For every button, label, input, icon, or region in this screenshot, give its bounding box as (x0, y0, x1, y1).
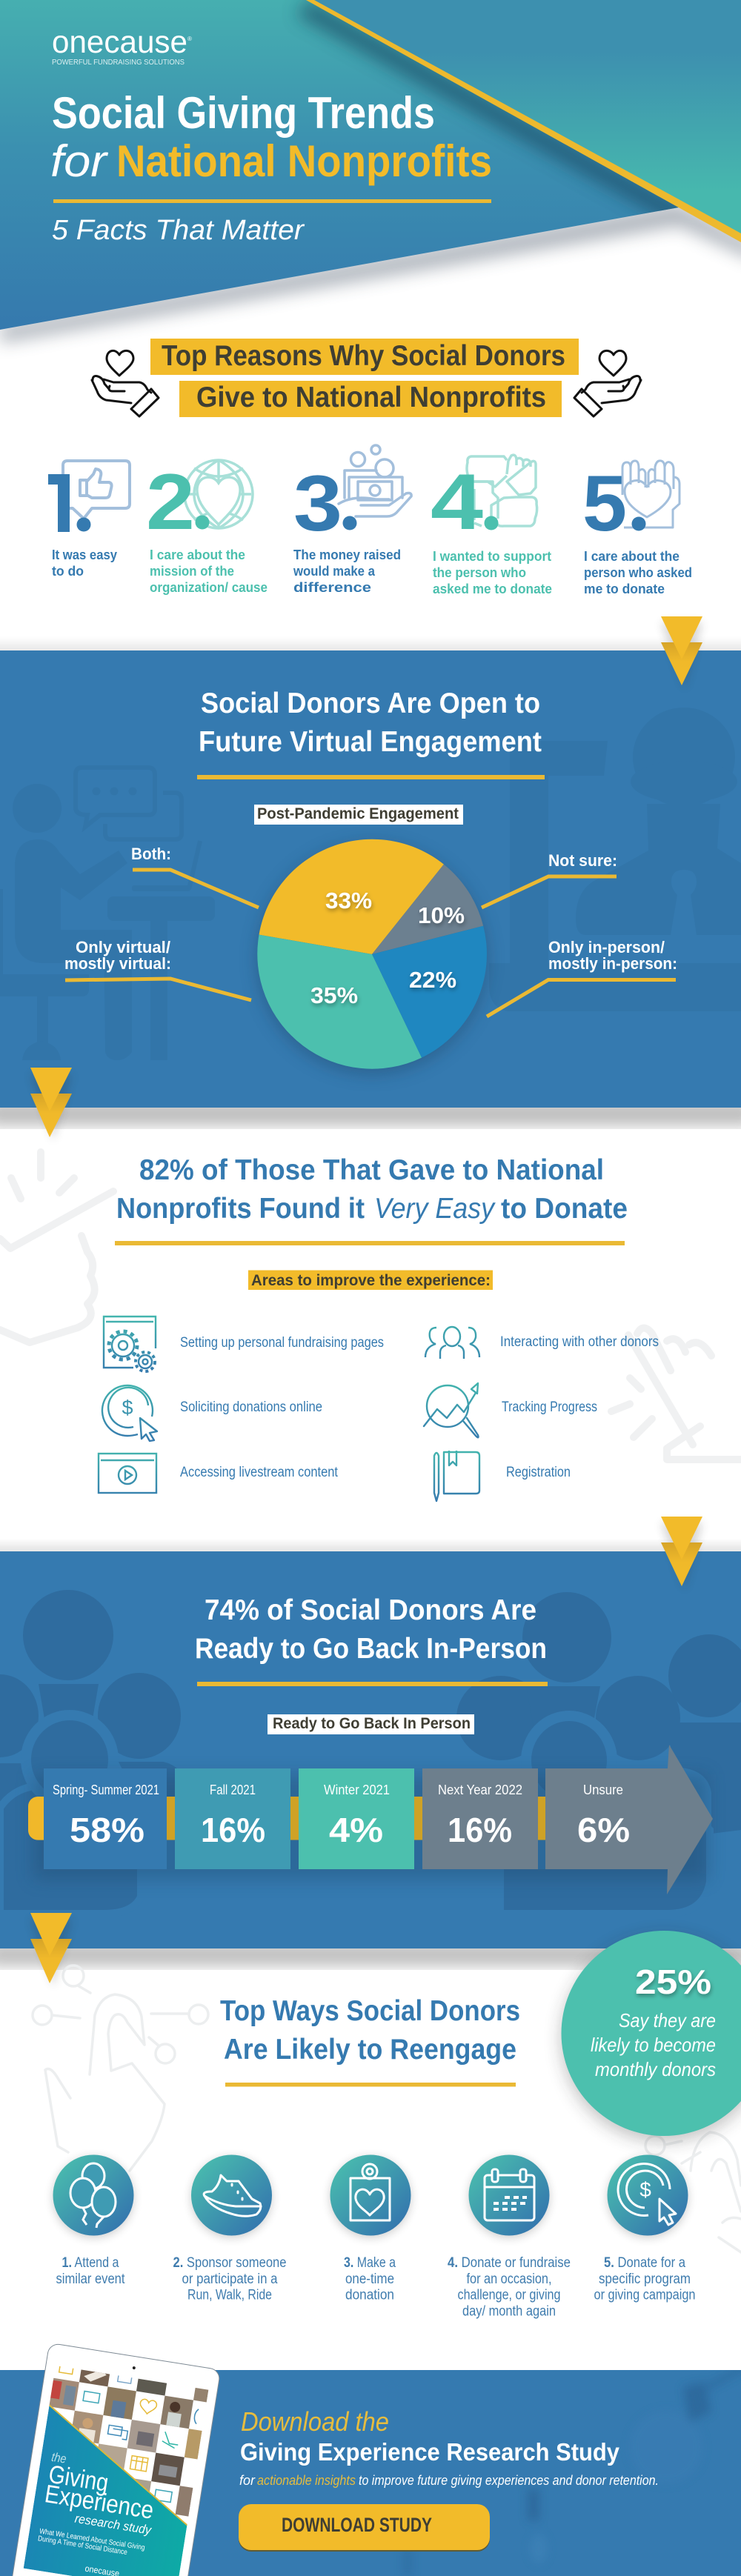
way 5: 5. Donate for a (604, 2255, 685, 2271)
subtitle: 5 Facts That Matter (52, 215, 305, 246)
panel: back in person (0, 1544, 741, 1964)
callout: 25 percent monthly donors: monthly donors (595, 2058, 716, 2080)
number 5: 5 (582, 459, 627, 548)
way 3: donation (345, 2288, 394, 2303)
reason text (52, 548, 117, 579)
way 1 (53, 2154, 133, 2287)
icon: group of people (425, 1327, 479, 1359)
call to action heading: Download the (241, 2406, 389, 2437)
cover title: During A Time of Social Distance (37, 2535, 128, 2557)
timeline segment: spring-summer 2021: Spring- Summer 2021 (53, 1783, 159, 1797)
heading: Top Ways Social Donors (220, 1995, 520, 2027)
item: tracking progress: Tracking Progress (502, 1400, 597, 1415)
background illustration: in-person attendee (489, 708, 741, 1011)
pie chart: 35% (310, 982, 358, 1008)
arrow: chevron into engagement panel (661, 616, 702, 689)
call to action description: actionable insights (257, 2473, 356, 2488)
way 5 (594, 2154, 695, 2303)
heading: Nonprofits Found it (116, 1193, 365, 1225)
reason text: I wanted to support (433, 549, 551, 564)
panel: top ways to reengage (33, 1966, 741, 2319)
item: tracking progress (424, 1383, 597, 1437)
callout: 25 percent monthly donors: 25% (635, 1963, 711, 2001)
logo: POWERFUL FUNDRAISING SOLUTIONS (52, 58, 185, 67)
reason 5 (582, 459, 692, 596)
number 4: 4 (431, 457, 483, 546)
timeline segment: unsure with arrow head (545, 1745, 713, 1894)
cover title: Giving (47, 2460, 110, 2497)
icon: calendar (468, 2154, 550, 2237)
callout: not sure: Not sure: (548, 851, 617, 870)
title (50, 88, 492, 186)
heading (195, 1594, 547, 1665)
heading: Very Easy (374, 1193, 496, 1225)
heading box line 1: Top Reasons Why Social Donors (162, 340, 565, 372)
reason text: organization/ cause (150, 580, 268, 595)
callout: not sure (482, 851, 617, 908)
icon: dollar and cursor (608, 2154, 688, 2237)
reason text: asked me to donate (433, 582, 552, 596)
callout: only in-person (487, 938, 677, 1016)
number 3: 3 (293, 459, 342, 548)
icon: donation box (330, 2154, 411, 2237)
reason text: difference (293, 580, 371, 595)
icon: hand holding money (339, 445, 411, 516)
way 4 (448, 2154, 571, 2319)
reason text: I care about the (584, 549, 679, 564)
reason 3 (293, 445, 411, 595)
icon: balloons (53, 2154, 133, 2237)
chart label: Post-Pandemic Engagement (257, 805, 459, 822)
item: interacting with donors (425, 1327, 659, 1359)
callout: only virtual (64, 938, 251, 1000)
timeline segment: spring-summer 2021 (44, 1768, 167, 1869)
reason text (150, 548, 268, 595)
button: download study: DOWNLOAD STUDY (282, 2514, 432, 2536)
title: for (50, 136, 108, 186)
reason 1 (48, 461, 130, 579)
pie chart (257, 839, 487, 1074)
timeline segment: fall 2021: 16% (201, 1811, 265, 1849)
reason text: would make a (293, 564, 376, 579)
reason text: The money raised (293, 548, 401, 562)
way 1: 1. Attend a (62, 2255, 119, 2271)
reason text: It was easy (52, 548, 117, 562)
timeline segment: fall 2021 (175, 1768, 290, 1869)
number 3 (293, 459, 357, 548)
logo: ® (187, 36, 192, 42)
way 2: Run, Walk, Ride (187, 2288, 272, 2303)
reason text: I care about the (150, 548, 245, 562)
reason text: the person who (433, 565, 526, 580)
number 4 (431, 457, 498, 546)
way 2: or participate in a (182, 2272, 278, 2287)
reason text: me to donate (584, 582, 665, 596)
item: registration (434, 1451, 571, 1501)
heading (220, 1995, 520, 2066)
arrow: chevron out of back in person panel (30, 1913, 72, 1987)
callout: both (131, 845, 259, 908)
callout: 25 percent monthly donors (562, 1931, 741, 2141)
reason text: mission of the (150, 564, 234, 579)
panel: download study (0, 2343, 741, 2576)
tablet mockup (0, 2343, 221, 2576)
reason text: to do (52, 564, 84, 579)
reason text (433, 549, 552, 596)
cover title: research study (74, 2512, 153, 2537)
item: soliciting donations: Soliciting donations online (180, 1400, 322, 1415)
way 3: one-time (345, 2272, 394, 2287)
heading: Are Likely to Reengage (224, 2034, 516, 2066)
reason 2 (146, 457, 268, 595)
icon: hands holding heart (622, 461, 679, 527)
item: soliciting donations: $ (122, 1397, 133, 1419)
icon: left hand with heart (92, 350, 159, 416)
item: soliciting donations (102, 1385, 322, 1441)
callout: 25 percent monthly donors: Say they are (619, 2009, 716, 2031)
way 2: 2. Sponsor someone (173, 2255, 286, 2271)
number 5 (582, 459, 646, 548)
icon: window with gears (104, 1317, 156, 1371)
timeline segment: unsure with arrow head: 6% (577, 1811, 630, 1849)
way 4: day/ month again (462, 2304, 556, 2319)
timeline segment: next year 2022: 16% (448, 1811, 512, 1849)
heading (199, 688, 542, 758)
way 3: 3. Make a (344, 2255, 396, 2271)
cover title (38, 2452, 153, 2576)
item: livestream content (99, 1454, 339, 1493)
icon: running shoe (191, 2154, 272, 2237)
call to action description: for (239, 2473, 256, 2488)
heading: 74% of Social Donors Are (205, 1594, 536, 1626)
timeline segment: next year 2022: Next Year 2022 (438, 1783, 522, 1797)
way 1: similar event (56, 2272, 125, 2287)
pie chart: 10% (418, 902, 465, 928)
cover title: What We Learned About Social Giving (39, 2527, 145, 2552)
section heading: top reasons (92, 339, 641, 417)
heading: Social Donors Are Open to (201, 688, 540, 719)
cover title: the (50, 2450, 67, 2466)
title: National Nonprofits (116, 136, 492, 186)
subheading tag: Areas to improve the experience: (251, 1272, 491, 1289)
way 2 (173, 2154, 286, 2303)
icon: four interlocked fists (467, 455, 537, 526)
logo: onecause (52, 24, 187, 60)
way 4: challenge, or giving (458, 2288, 560, 2303)
heading: Ready to Go Back In-Person (195, 1633, 547, 1665)
icon: video window (99, 1454, 156, 1493)
heading: 82% of Those That Gave to National (139, 1154, 604, 1186)
call to action description (239, 2473, 659, 2488)
timeline segment: fall 2021: Fall 2021 (210, 1783, 256, 1797)
number 1 (48, 474, 90, 532)
reason text: person who asked (584, 565, 692, 580)
number 2: 2 (146, 457, 195, 546)
item: personal fundraising pages (104, 1317, 384, 1371)
heading box line 2: Give to National Nonprofits (196, 382, 546, 413)
background illustration: faint pointing hands (0, 1152, 741, 1460)
panel: very easy to donate (0, 1152, 741, 1501)
item: personal fundraising pages: Setting up personal fundraising pages (180, 1335, 384, 1351)
callout: only in-person: Only in-person/ (548, 938, 665, 956)
background illustration: blurred light bulb (526, 2383, 713, 2520)
cover collage (24, 2366, 209, 2576)
callout: both: Both: (131, 845, 171, 863)
timeline segment: next year 2022 (422, 1768, 538, 1869)
way 4: 4. Donate or fundraise (448, 2255, 571, 2271)
call to action description: to improve future giving experiences and donor retention. (359, 2473, 659, 2488)
reason text (293, 548, 401, 595)
call to action heading (240, 2406, 620, 2466)
icon: notebook and pencil (434, 1451, 479, 1501)
icon: dollar coin and cursor (102, 1385, 157, 1441)
item: interacting with donors: Interacting with other donors (500, 1334, 659, 1350)
way 4: for an occasion, (467, 2272, 551, 2287)
background illustration: virtual attendee (0, 768, 215, 1060)
button: download study (239, 2504, 490, 2552)
callout: only virtual: Only virtual/ (76, 938, 170, 956)
timeline segment: spring-summer 2021: 58% (70, 1811, 144, 1849)
callout: only in-person: mostly in-person: (548, 954, 677, 973)
heading: to Donate (501, 1193, 628, 1225)
number 2 (146, 457, 209, 546)
callout: 25 percent monthly donors: likely to become (591, 2034, 716, 2056)
icon: thumbs up speech bubble (63, 461, 130, 519)
timeline arrow (28, 1745, 713, 1894)
cover tile icons (58, 2366, 199, 2503)
way 3 (330, 2154, 411, 2303)
call to action heading: Giving Experience Research Study (240, 2438, 620, 2466)
icon: right hand with heart (574, 350, 641, 416)
panel: virtual engagement (0, 643, 741, 1123)
timeline segment: winter 2021: 4% (329, 1811, 383, 1849)
icon: globe with heart (185, 460, 253, 528)
chart label: Ready to Go Back In Person (273, 1715, 471, 1732)
heading: Future Virtual Engagement (199, 726, 542, 758)
arrow: chevron into back in person panel (661, 1517, 702, 1590)
arrow: chevron out of engagement panel (30, 1068, 72, 1141)
header banner (0, 0, 741, 342)
icon: dollar and cursor: $ (639, 2178, 651, 2201)
heading (116, 1154, 628, 1225)
icon: magnifier over rising chart (424, 1383, 479, 1437)
item: livestream content: Accessing livestream content (180, 1465, 339, 1480)
item: registration: Registration (506, 1465, 571, 1480)
reason 4 (431, 455, 552, 596)
timeline segment: winter 2021 (299, 1768, 414, 1869)
title: Social Giving Trends (52, 88, 435, 138)
cover title: Experience (43, 2480, 156, 2525)
background illustration: crowd silhouettes (0, 1590, 741, 1914)
callout: only virtual: mostly virtual: (64, 954, 171, 973)
way 5: or giving campaign (594, 2288, 695, 2303)
background illustration: faint tapping hands (33, 1966, 741, 2252)
pie chart: 33% (325, 888, 372, 913)
pie chart: 22% (409, 967, 456, 993)
timeline segment: unsure with arrow head: Unsure (583, 1783, 623, 1797)
timeline segment: winter 2021: Winter 2021 (324, 1783, 390, 1797)
way 5: specific program (599, 2272, 691, 2287)
title rule (53, 199, 491, 203)
reason text (584, 549, 692, 596)
